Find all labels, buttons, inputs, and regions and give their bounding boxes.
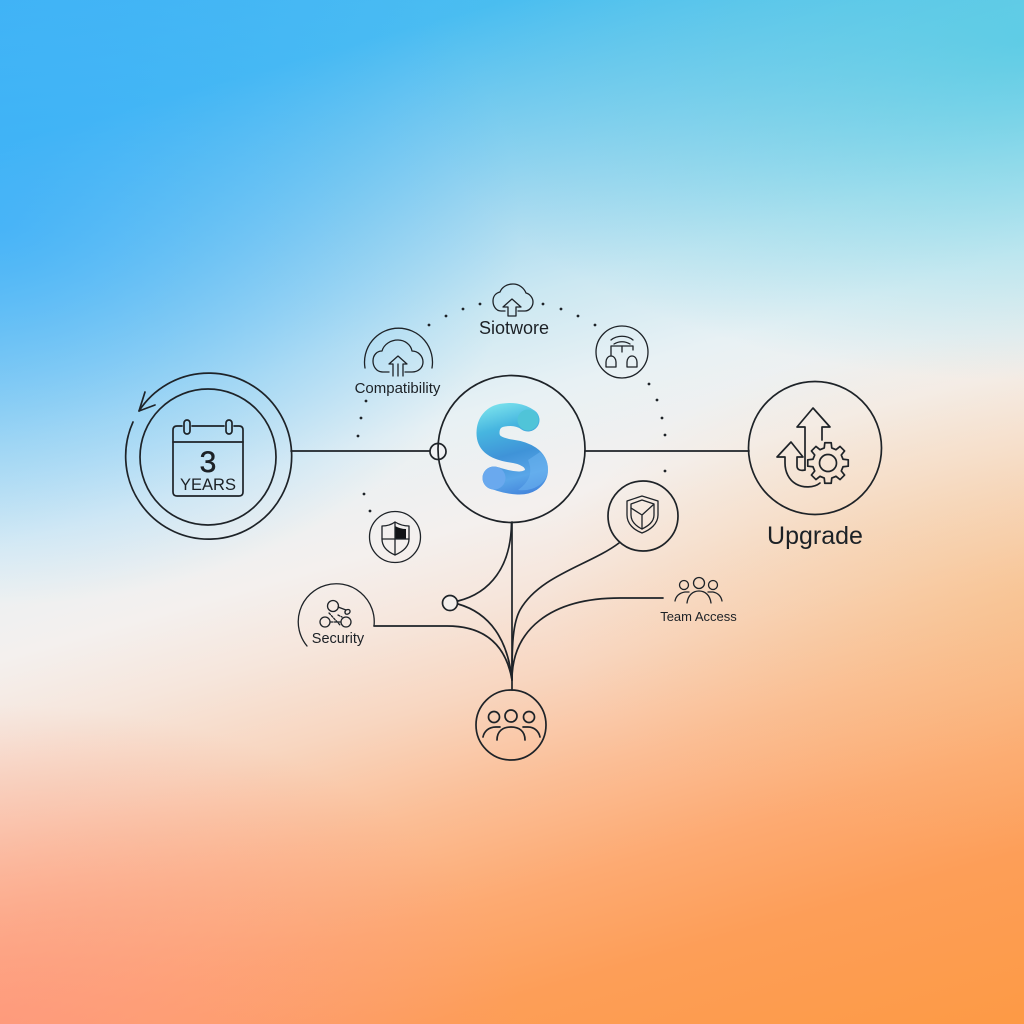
connector lines	[291, 451, 749, 690]
panel: team access	[660, 578, 737, 624]
upgrade label: Upgrade	[767, 522, 863, 550]
icon: shield	[627, 496, 658, 533]
icon: gear	[808, 443, 848, 483]
panel: central logo	[438, 376, 585, 522]
icon: upgrade arrows	[777, 408, 830, 487]
panel: upgrade	[748, 382, 882, 550]
icon: S logo	[482, 410, 548, 490]
dotted arc	[357, 303, 666, 512]
software label: Siotwore	[479, 318, 549, 338]
icon: people	[483, 710, 540, 740]
inner circle	[140, 389, 276, 525]
panel: compatibility	[355, 328, 441, 397]
calendar number: 3	[200, 446, 216, 479]
panel: security	[298, 584, 374, 647]
calendar label: YEARS	[180, 476, 236, 494]
panel: 3 years calendar	[126, 373, 292, 539]
cycle arrow ring	[126, 373, 292, 539]
arc	[364, 328, 433, 368]
panel: software	[479, 284, 549, 338]
security label: Security	[312, 631, 365, 647]
icon: cloud upload	[493, 284, 533, 316]
arc	[298, 584, 374, 646]
icon: network	[606, 336, 637, 367]
icon: cloud upload	[373, 340, 423, 376]
icon: people	[675, 578, 722, 603]
panel: left shield	[370, 512, 420, 562]
panel: network	[596, 326, 648, 378]
panel: bottom team	[476, 690, 546, 760]
icon: calendar	[173, 420, 243, 496]
small junction node	[442, 596, 458, 610]
icon: shield	[382, 522, 409, 555]
icon: security nodes	[320, 600, 351, 627]
panel: right shield	[608, 481, 678, 551]
compatibility label: Compatibility	[355, 380, 441, 397]
small connector node	[430, 444, 446, 460]
team access label: Team Access	[660, 609, 737, 624]
